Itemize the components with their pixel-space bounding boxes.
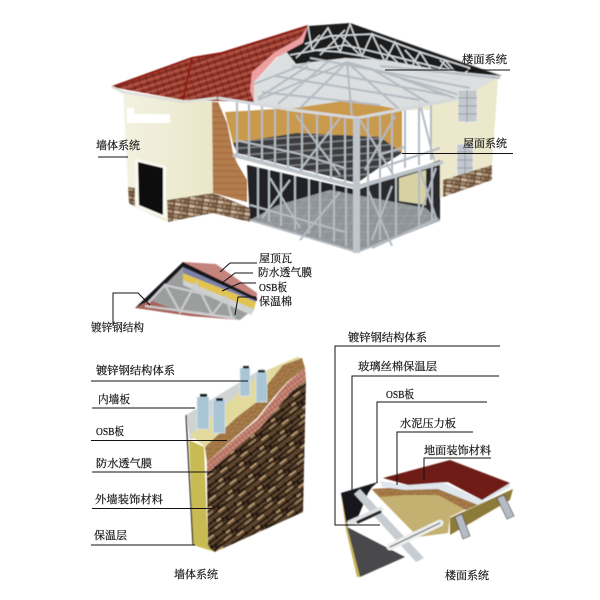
steel studs (197, 368, 267, 433)
stud caps (200, 366, 265, 401)
orange upper interior wall (225, 100, 402, 153)
roof steel grid (254, 58, 500, 118)
roof trusses (290, 24, 480, 80)
edge line (186, 415, 193, 545)
steel joists (350, 510, 440, 547)
upper joist floor (233, 133, 402, 183)
window lower (457, 144, 473, 176)
labels: floor section: OSB板 (386, 387, 414, 401)
red floor (383, 460, 510, 500)
labels: floor section (348, 330, 491, 457)
roof ridge lines (112, 26, 308, 100)
label: floor system: 楼面系统 (462, 52, 507, 66)
main beams (218, 98, 462, 118)
panel: house cutaway (112, 23, 502, 253)
labels: roof section: OSB板 (259, 280, 287, 294)
truss members (145, 283, 235, 318)
labels: roof section: 防水透气膜 (258, 265, 312, 279)
labels: roof section: 屋顶瓦 (259, 252, 292, 265)
lower dark interior (247, 165, 357, 252)
panel: wall section (186, 357, 306, 552)
inner wall board (186, 368, 268, 440)
stone base left (128, 187, 135, 207)
cement board (380, 481, 510, 505)
callouts: wall section (91, 381, 248, 545)
tiled floor (250, 190, 438, 252)
stone base (167, 193, 250, 222)
labels: floor section: 地面装饰材料 (424, 443, 491, 457)
pink tiles (183, 262, 257, 298)
label: wall system (96, 138, 140, 157)
label: wall system: 墙体系统 (96, 138, 140, 152)
black roof top (285, 23, 502, 76)
corner post (353, 118, 360, 253)
labels: wall section: 内墙板 (98, 392, 130, 406)
panel: roof section (135, 262, 257, 320)
label: floor system (385, 52, 510, 70)
dark layer (135, 262, 257, 308)
labels: roof section: 镀锌钢结构 (91, 320, 144, 334)
yellow edge (341, 494, 360, 577)
labels: wall section: 外墙装饰材料 (95, 492, 163, 506)
floor joists right (455, 495, 514, 539)
labels: wall section: 镀锌钢结构体系 (96, 363, 175, 377)
callouts: roof section (113, 263, 257, 325)
caption: floor system: 楼面系统 (445, 568, 489, 582)
labels: floor section: 镀锌钢结构体系 (348, 330, 427, 344)
caption: wall system: 墙体系统 (174, 567, 218, 581)
cream inner wall (399, 170, 426, 205)
dark bottom panel (347, 527, 405, 577)
labels: wall section: 防水透气膜 (96, 456, 152, 470)
pink membrane edge (250, 26, 308, 102)
panel: floor section (341, 460, 514, 577)
membrane (207, 368, 306, 473)
labels: roof section: 保温棉 (259, 294, 292, 308)
roof truss body (135, 262, 255, 320)
OSB (372, 485, 482, 510)
door (136, 160, 165, 217)
lower right interior (357, 160, 440, 252)
stone cladding (207, 380, 306, 552)
steel channel (354, 489, 424, 562)
label: roof system: 屋面系统 (463, 136, 507, 150)
right cream wall (402, 78, 498, 200)
insulation front (450, 489, 513, 535)
left cream wall (123, 92, 213, 222)
blue layer (183, 267, 256, 302)
labels: wall section: OSB板 (96, 424, 124, 438)
side insulation (189, 440, 215, 552)
labels: wall section (94, 363, 175, 542)
bottom tile (135, 300, 240, 320)
wall highlight (127, 108, 170, 123)
black base (341, 482, 378, 527)
top insulation (190, 357, 302, 447)
insulation (372, 487, 478, 537)
yellow layer (183, 273, 256, 309)
roof eave (112, 87, 217, 102)
window upper (458, 90, 477, 122)
callouts: floor section (335, 346, 500, 525)
steel frame walls (235, 100, 440, 248)
wood sheathing panel (212, 102, 247, 202)
OSB board (205, 358, 305, 462)
labels: roof section (91, 252, 312, 334)
labels: floor section: 玻璃丝棉保温层 (358, 359, 437, 373)
stone base right (443, 165, 492, 197)
label: roof system (402, 136, 513, 154)
roof tiles (112, 26, 308, 102)
steel roof background (218, 23, 502, 118)
labels: wall section: 保温层 (94, 528, 127, 542)
labels: floor section: 水泥压力板 (400, 416, 456, 430)
insulation layer (183, 278, 255, 315)
